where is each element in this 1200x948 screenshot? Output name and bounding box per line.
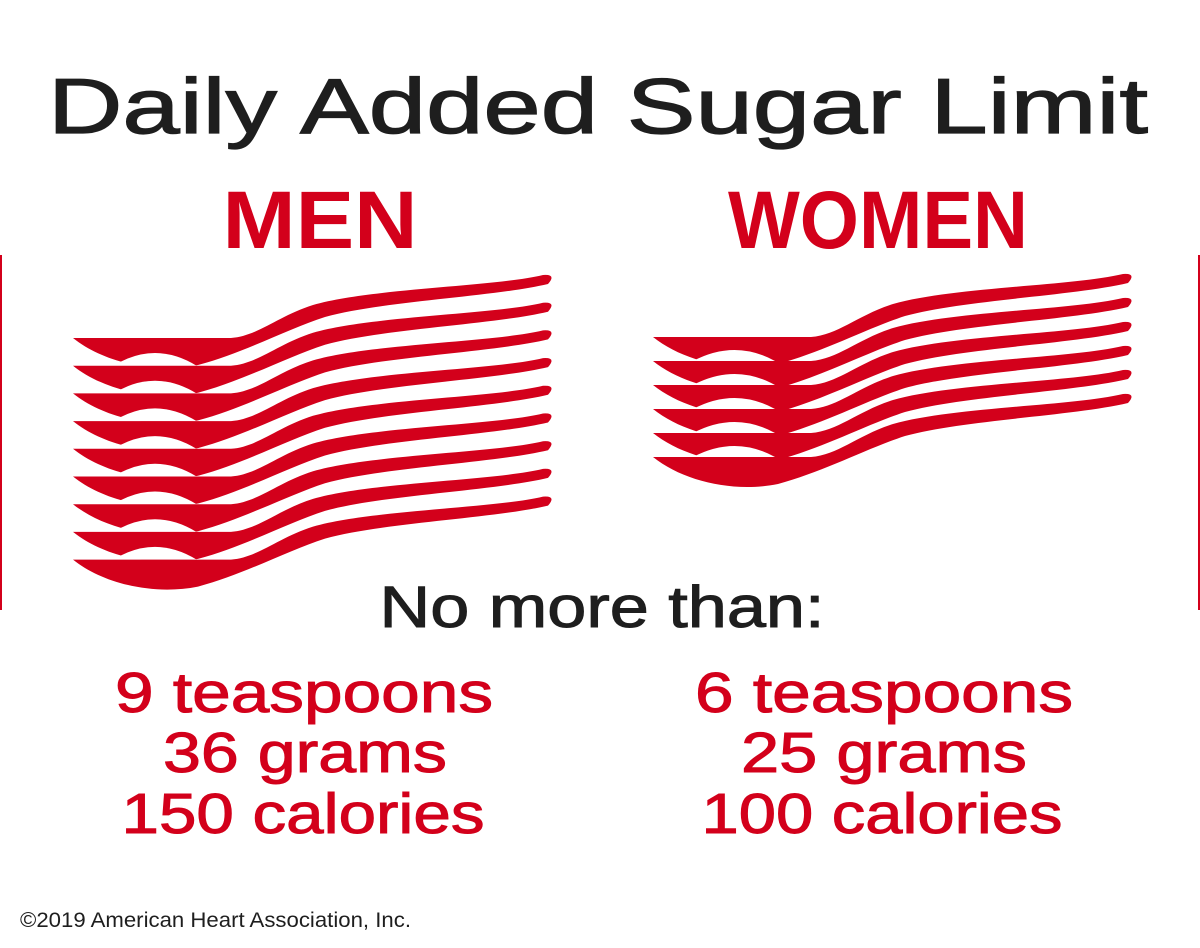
- heading: MEN: MEN: [222, 175, 418, 266]
- text block: women limits: 100 calories: [702, 782, 1062, 846]
- text block: women limits: [695, 661, 1073, 846]
- text block: women limits: 25 grams: [741, 721, 1027, 785]
- icon: 6 spoons (women): [653, 274, 1132, 487]
- title: Daily Added Sugar Limit: [48, 62, 1148, 150]
- subheading: No more than:: [380, 575, 824, 640]
- text block: women limits: 6 teaspoons: [695, 661, 1073, 725]
- text block: men limits: 36 grams: [163, 721, 447, 785]
- text block: men limits: [115, 661, 493, 846]
- edge lines: [0, 255, 1200, 610]
- text block: men limits: 9 teaspoons: [115, 661, 493, 725]
- footer: ©2019 American Heart Association, Inc.: [20, 909, 411, 932]
- icon: 9 spoons (men): [73, 275, 552, 590]
- text block: men limits: 150 calories: [122, 782, 484, 846]
- heading: WOMEN: WOMEN: [728, 175, 1028, 266]
